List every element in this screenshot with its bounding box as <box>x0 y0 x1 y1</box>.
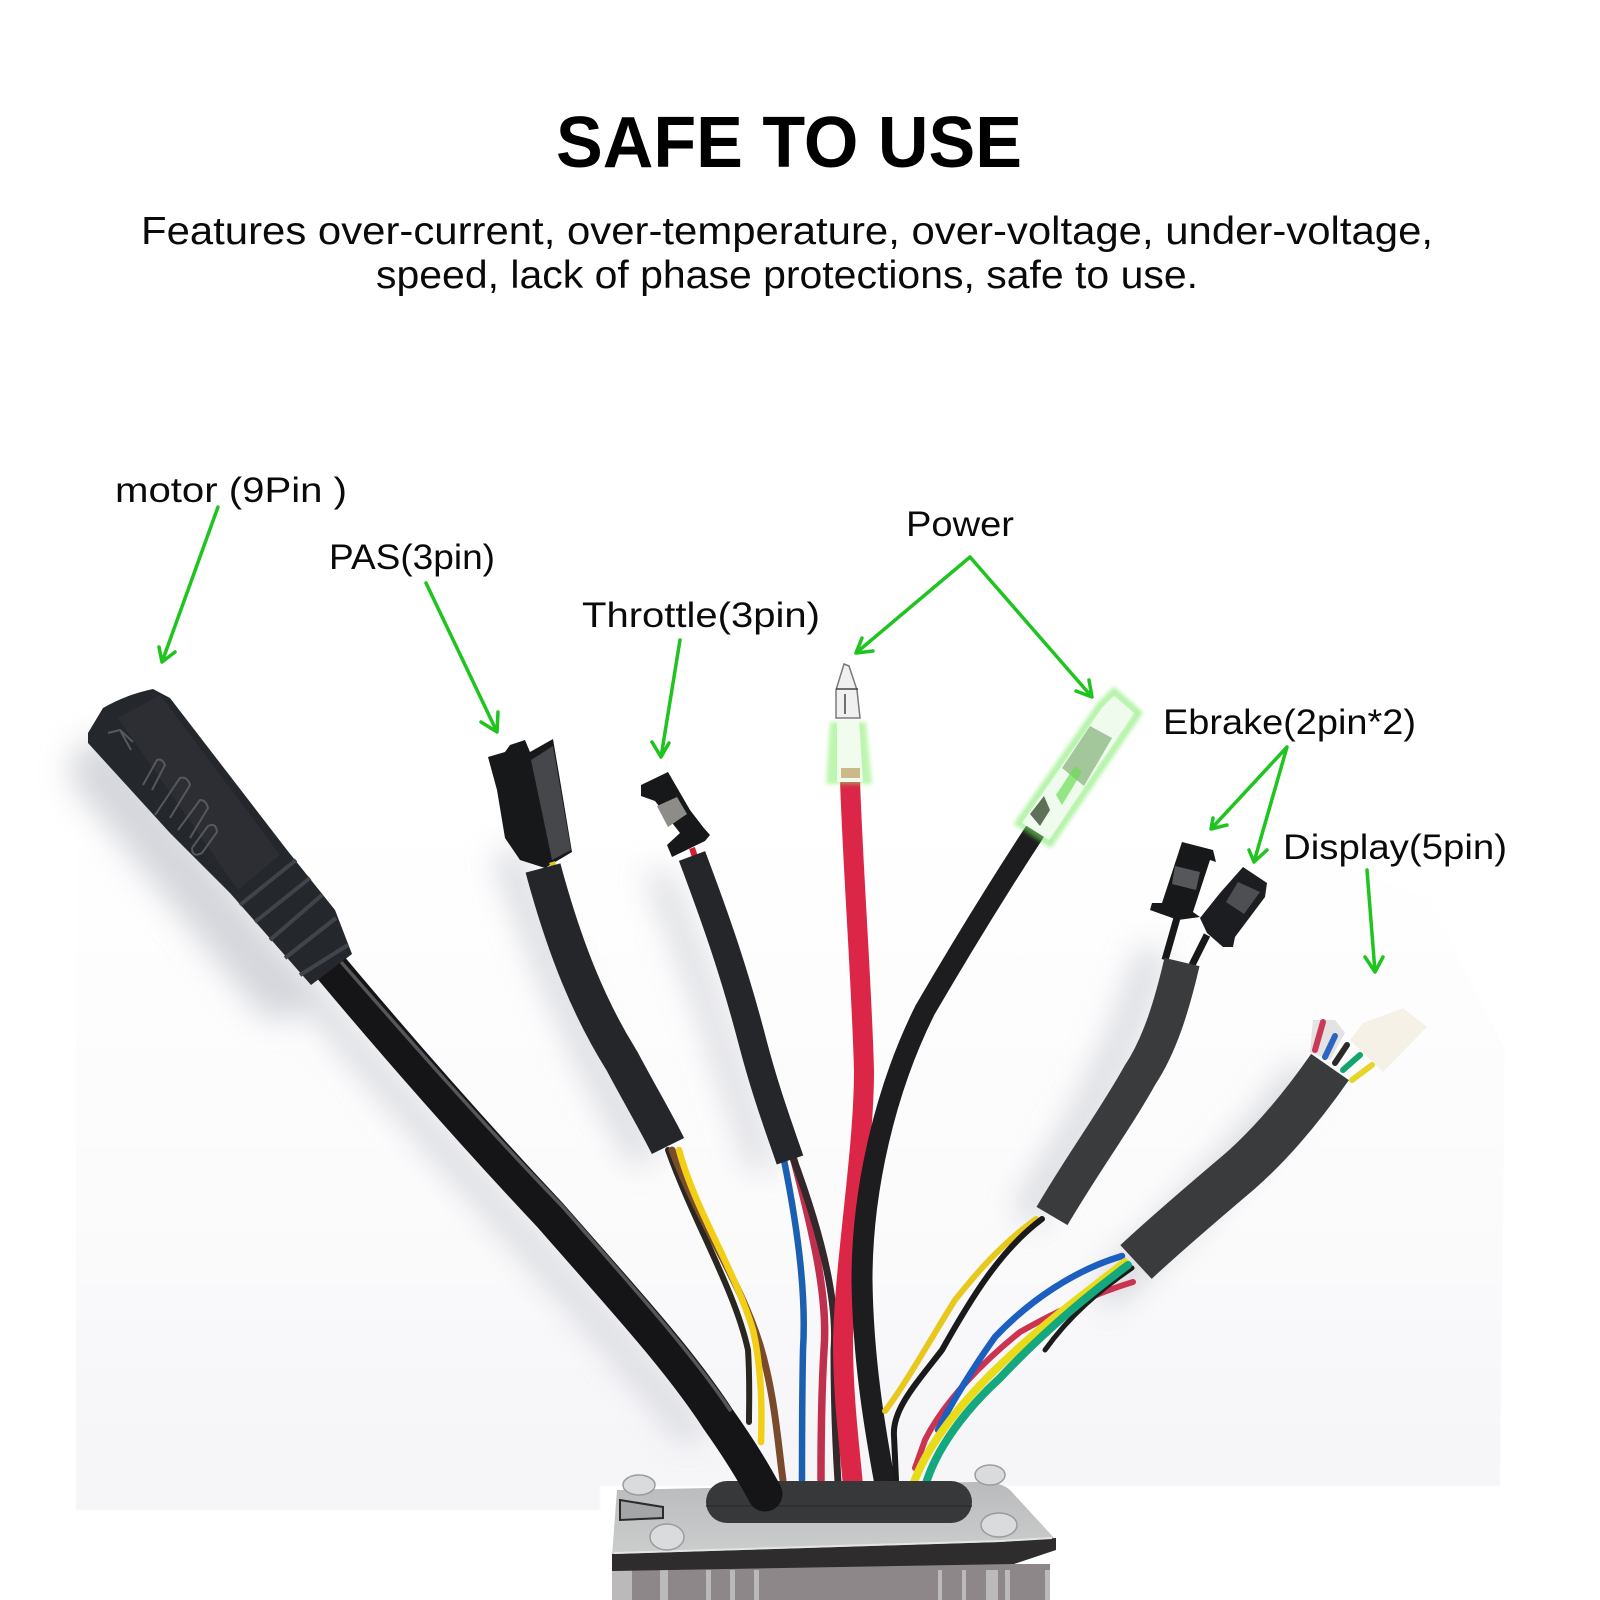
throttle heat-shrink sleeve <box>692 856 790 1160</box>
ebrake connectors <box>1150 842 1267 965</box>
soft cable shadows <box>100 770 1300 1430</box>
cable: throttle wires <box>784 1155 838 1482</box>
male power terminal <box>826 664 872 784</box>
wall backdrop <box>76 744 1505 1510</box>
title: SAFE TO USE <box>556 103 1022 183</box>
ebrake heat-shrink sleeve <box>1052 962 1182 1216</box>
plate edge <box>612 1538 1056 1571</box>
PAS connector <box>488 739 572 872</box>
tab <box>620 1500 663 1520</box>
cable: motor <box>332 963 765 1494</box>
arrow: motor <box>159 507 218 662</box>
cable: PAS wires <box>668 1150 783 1480</box>
label: ebrake: Ebrake(2pin*2) <box>1163 703 1416 742</box>
arrow: display <box>1365 870 1383 972</box>
rubber grommet <box>706 1481 972 1523</box>
subtitle <box>141 210 1433 297</box>
arrows: ebrake <box>1211 747 1287 862</box>
subtitle: speed, lack of phase protections, safe to use. <box>376 254 1198 297</box>
cable: ebrake wires <box>885 1219 1042 1480</box>
label: display: Display(5pin) <box>1283 828 1507 867</box>
metal plate <box>612 1482 1056 1569</box>
subtitle: Features over-current, over-temperature, over-voltage, under-voltage, <box>141 210 1433 253</box>
controller box <box>612 1465 1056 1600</box>
PAS heat-shrink sleeve <box>543 868 668 1146</box>
box body <box>612 1564 1050 1600</box>
display heat-shrink sleeve <box>1136 1067 1330 1262</box>
label: throttle: Throttle(3pin) <box>582 596 820 635</box>
display connector <box>1310 1008 1427 1080</box>
arrow: PAS <box>426 583 498 732</box>
cable: power black <box>862 833 1034 1484</box>
label: power: Power <box>906 505 1014 544</box>
arrow: throttle <box>652 640 680 757</box>
motor connector <box>88 689 352 985</box>
screws <box>623 1465 1017 1550</box>
female power terminal <box>1018 691 1139 844</box>
cable: display wires <box>913 1256 1133 1487</box>
label: PAS: PAS(3pin) <box>329 538 495 577</box>
label: motor: motor (9Pin ) <box>115 471 347 510</box>
arrows: power <box>856 557 1092 697</box>
throttle connector <box>641 772 710 860</box>
cable: power red <box>843 780 864 1486</box>
photo: wiring harness <box>76 664 1505 1600</box>
